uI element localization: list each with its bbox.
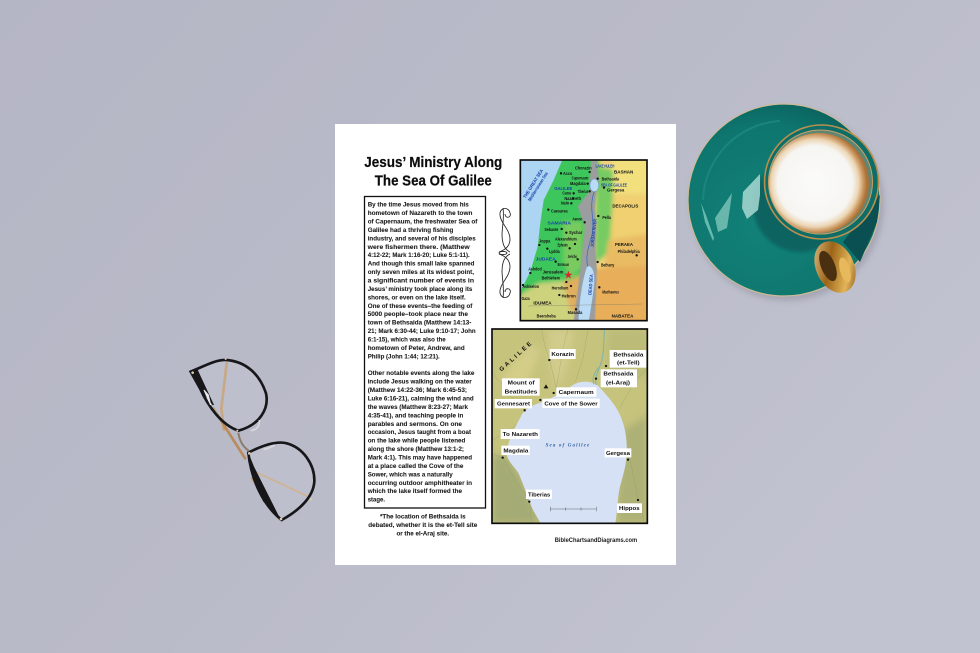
map 1 labels: JORDAN RIVER	[590, 218, 598, 247]
map 1 labels: Mediterranean Sea	[527, 171, 549, 202]
label: Korazin: Korazin	[551, 352, 575, 358]
text panel: description: 21; Mark 6:30-44; Luke 9:10-17; John	[368, 328, 476, 335]
map 1 labels: Magdala	[570, 181, 586, 186]
Sea of Galilee	[590, 179, 599, 192]
map 1 labels: SAMARIA	[547, 221, 572, 226]
map 1 labels: Bethany	[601, 263, 615, 268]
region name: GALILEE	[499, 340, 535, 373]
label: Gergesa: Gergesa	[606, 451, 631, 457]
document page	[335, 124, 676, 565]
text panel: description: a significant number of events in	[368, 278, 474, 284]
text panel: description: industry, and several of his disciples	[368, 235, 476, 242]
map 1 labels: Caesarea	[551, 208, 568, 213]
map 1 labels: Nain	[561, 200, 569, 205]
map 1 labels: Jericho	[568, 254, 577, 259]
text panel: description: along the shore (Matthew 13:1-2;	[368, 446, 464, 453]
Jordan inlet	[593, 329, 605, 385]
map 1 labels: Cana	[562, 190, 572, 195]
label: Gennesaret: Gennesaret	[497, 402, 530, 408]
map 1 labels: Acco	[563, 171, 573, 176]
map 1 labels: Masada	[568, 310, 583, 315]
label: Magdala: Magdala	[503, 448, 529, 454]
Jordan river	[587, 192, 594, 267]
map 1 labels: Sychar	[569, 230, 583, 235]
place markers	[501, 359, 639, 503]
text panel: description: 6:1-15), which was also the	[368, 336, 446, 344]
text panel: description: Mark 4:1). This may have happened	[368, 454, 472, 462]
label: Capernaum	[556, 387, 596, 397]
bridge	[238, 433, 249, 451]
text panel: description: parables and sermons. On one	[368, 421, 462, 428]
map 1 labels: Jerusalem	[543, 269, 564, 274]
text panel: description: 4:35-41), and teaching people in	[368, 412, 463, 419]
text panel: description: hometown of Nazareth to the town	[368, 210, 472, 217]
label: Cove of the Sower	[542, 399, 600, 408]
footnote: *The location of Bethsaida is	[380, 514, 466, 521]
text panel: description: And though this small lake spanned	[368, 261, 474, 268]
label: Bethsaida (et-Tell): (et-Tell)	[617, 361, 640, 367]
title: The Sea Of Galilee	[375, 174, 492, 190]
Jordan rift valley	[574, 160, 599, 321]
map 1 labels: PERAEA	[615, 242, 633, 247]
text panel: description: 5000 people–took place near the	[368, 311, 468, 318]
label: Mount of Beatitudes: Beatitudes	[505, 389, 537, 395]
red star: Jerusalem: ★	[564, 269, 573, 282]
map 1 labels: Philadelphia	[618, 249, 640, 254]
map 1 labels: BASHAN	[614, 170, 633, 175]
frame rivets	[191, 358, 312, 520]
map 1 labels	[522, 163, 640, 319]
nose pads	[251, 420, 275, 449]
left lens frame	[191, 360, 267, 431]
handle	[806, 234, 864, 300]
label: To Nazareth	[501, 429, 540, 439]
website credit: BibleChartsandDiagrams.com	[555, 538, 637, 544]
map 1 labels: Aenon	[572, 217, 583, 222]
right lens frame	[248, 443, 314, 520]
map 1 labels: JUDAEA	[536, 256, 556, 261]
label: Hippos: Hippos	[619, 506, 640, 512]
title: Jesus’ Ministry Along	[364, 155, 502, 171]
map 1 labels: Ashkelon	[522, 284, 539, 289]
footnote	[368, 514, 478, 538]
text panel: description: occurring outdoor amphitheater in	[368, 480, 472, 487]
map 1 labels: GALILEE	[554, 186, 572, 191]
label: Bethsaida (et-Tell)	[610, 350, 646, 368]
cup rim and coffee	[764, 125, 878, 239]
text panel: description: which the lake itself formed the	[367, 488, 462, 495]
map: Israel in the time of Jesus	[520, 159, 648, 322]
Dead Sea	[578, 266, 594, 321]
text panel: description: town of Bethsaida (Matthew 14:13-	[368, 320, 471, 327]
map 1 labels: Nazareth	[564, 196, 581, 201]
text panel: description	[364, 196, 486, 508]
map 1 labels: Hebron	[562, 294, 576, 299]
map 1 labels: Chorazin	[575, 165, 592, 170]
label: Capernaum: Capernaum	[559, 390, 594, 396]
terrain	[492, 329, 647, 523]
saucer and coffee cup	[688, 104, 884, 301]
city markers	[522, 171, 638, 310]
map 1 labels: DEAD SEA	[587, 274, 594, 295]
map 1 labels: Sebaste	[544, 227, 559, 232]
eyeglasses	[191, 358, 314, 520]
text panel: description: Sower, which was a naturally	[368, 471, 453, 478]
map 1 labels: SEA OF GALILEE	[601, 183, 627, 188]
text panel: description: at a place called the Cove of the	[368, 463, 464, 470]
label: Gergesa	[605, 448, 631, 457]
map 1 labels: Capernaum	[572, 176, 589, 181]
lake name: Sea of Galilee	[546, 443, 590, 448]
map 1 labels: DECAPOLIS	[612, 204, 639, 209]
label: Tiberias	[526, 490, 552, 499]
map 1 labels: Tiberias	[578, 189, 589, 194]
text panel: description: include Jesus walking on the water	[368, 379, 472, 386]
label: To Nazareth: To Nazareth	[503, 432, 539, 438]
label: Bethsaida (el-Araj)	[601, 369, 637, 387]
footnote: or the el-Araj site.	[396, 531, 449, 538]
text panel: description: occasion, Jesus taught from a boat	[368, 429, 472, 436]
sea	[520, 160, 562, 292]
ornament: scroll flourish	[499, 208, 510, 298]
map 1 labels: IDUMEA	[533, 300, 552, 305]
label: Bethsaida (el-Araj): (el-Araj)	[606, 380, 630, 386]
map 1 labels: Ephraim	[558, 242, 568, 247]
map 1 labels: Gergesa	[607, 188, 625, 193]
label: Cove of the Sower: Cove of the Sower	[544, 401, 599, 407]
text panel: description: shores, or even on the lake itself.	[368, 294, 466, 301]
label: Mount of Beatitudes: Mount of	[508, 381, 535, 387]
map 1 labels: Herodium	[552, 285, 569, 290]
map 1 labels: Ashdod	[528, 267, 542, 272]
text panel: description: Jesus’ ministry took place along its	[368, 286, 473, 293]
scale bar	[550, 507, 596, 511]
map 1 labels: Machaerus	[602, 289, 620, 294]
text panel: description: were fishermen there. (Matthew	[367, 244, 471, 251]
label: Bethsaida (el-Araj): Bethsaida	[603, 372, 634, 378]
label: Korazin	[550, 349, 576, 359]
map 1 labels: Joppa	[539, 239, 551, 244]
map 1 labels: Emmaus	[558, 262, 569, 267]
map 1 labels: Beersheba	[537, 314, 556, 319]
text panel: description: Luke 6:16-21), calming the wind and	[368, 396, 474, 402]
text panel: description: Philip (John 1:44; 12:21).	[368, 353, 440, 360]
lake	[507, 382, 627, 523]
label: Gennesaret	[495, 399, 532, 408]
text panel: description: Other notable events along the lake	[368, 370, 475, 377]
text panel: description: only seven miles at its widest point,	[368, 269, 474, 276]
map 1 labels: THE GREAT SEA	[522, 168, 544, 199]
label: Mount of Beatitudes	[502, 378, 540, 396]
footnote: debated, whether it is the et-Tell site	[368, 522, 478, 529]
label: Magdala	[501, 446, 530, 455]
label: Bethsaida (et-Tell): Bethsaida	[613, 352, 644, 358]
map 1 labels: Gaza	[522, 296, 530, 301]
label: Tiberias: Tiberias	[528, 492, 550, 498]
cup body	[753, 158, 847, 252]
text panel: description: One of these events–the feeding of	[368, 303, 473, 310]
text panel: description: stage.	[368, 497, 385, 504]
land relief	[521, 160, 646, 320]
map 1 labels: Bethlehem	[542, 276, 560, 281]
map 1 labels: Bethsaida	[602, 177, 620, 182]
text panel: description: By the time Jesus moved from his	[368, 202, 469, 209]
map 1 labels: Lydda	[549, 249, 560, 254]
map: Sea of Galilee detail	[492, 329, 647, 523]
saucer	[688, 104, 880, 296]
label: Hippos	[617, 503, 642, 513]
map 1 labels: Alexandrium	[555, 236, 577, 241]
text panel: description: hometown of Peter, Andrew, and	[368, 345, 465, 352]
temple arms	[213, 363, 308, 520]
text panel: description: the waves (Matthew 8:23-27; Mark	[368, 404, 468, 411]
text panel: description: (Matthew 14:22-36; Mark 6:45-53;	[368, 387, 467, 394]
text panel: description: of Capernaum, the freshwater Sea of	[368, 218, 478, 226]
text panel: description: on the lake while people listened	[368, 438, 465, 445]
title	[364, 155, 502, 190]
map 1 labels: NABATEA	[612, 314, 633, 319]
text panel: description: 4:12-22; Mark 1:16-20; Luke 5:1-11).	[368, 252, 470, 259]
map 1 labels: Pella	[602, 215, 612, 220]
map 1 labels: LAKE HULEH	[596, 163, 615, 168]
text panel: description: Galilee had a thriving fishing	[368, 227, 453, 234]
